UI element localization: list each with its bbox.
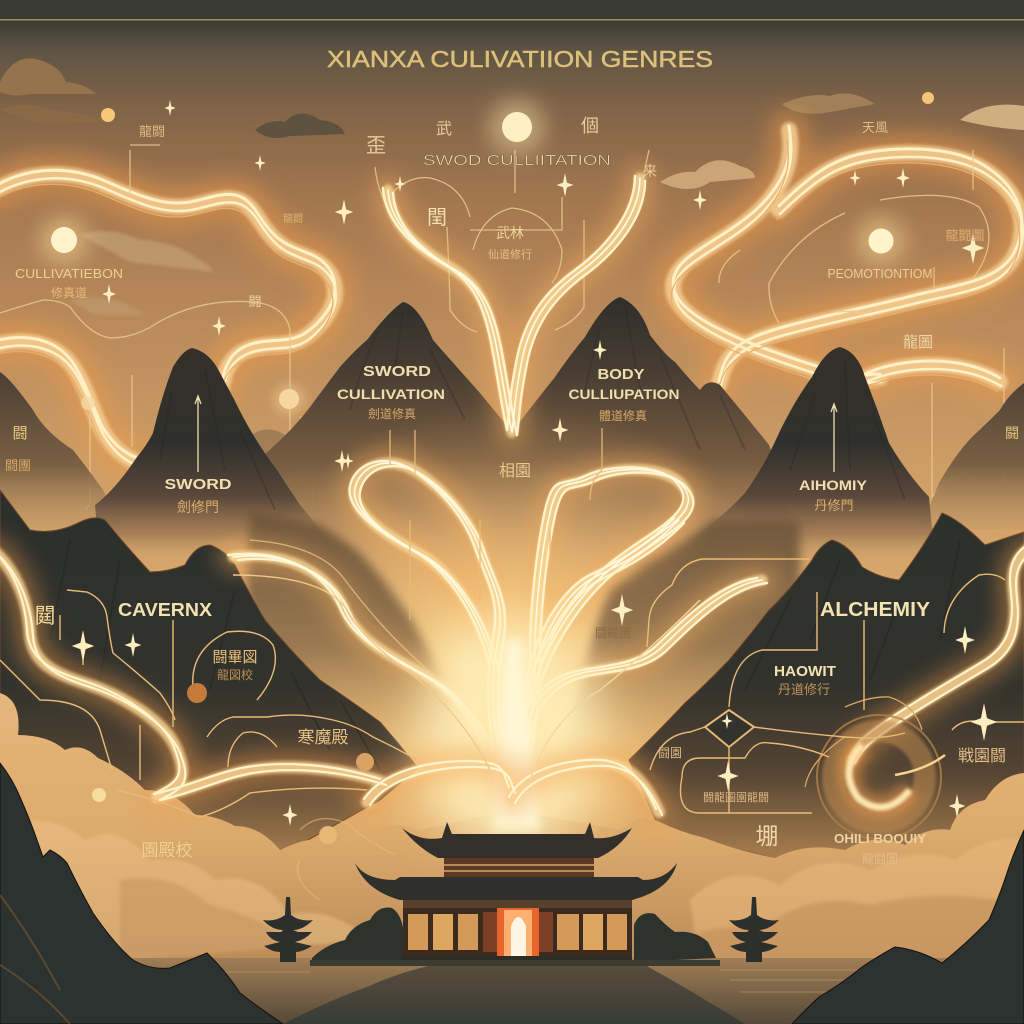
sparkle stars xyxy=(72,100,997,826)
label: promotion right: PEOMOTIONTIOM xyxy=(828,266,932,281)
left mid mountain xyxy=(95,348,345,560)
water in the foreground xyxy=(0,958,1024,1024)
label: lower right: OHILI BOOUIY xyxy=(834,831,926,846)
label: cultivation left: 闘 xyxy=(248,294,262,309)
diamond node xyxy=(705,710,754,747)
label: small script center: 闘園 xyxy=(658,746,682,760)
temple xyxy=(310,822,720,966)
label: cultivation left: 龍闘 xyxy=(283,212,303,225)
lower left mountain xyxy=(0,490,418,850)
label: small script center: 園殿校 xyxy=(142,841,192,860)
label: promotion right: 龍圖 xyxy=(903,334,933,351)
lower right mountain xyxy=(629,513,1024,860)
ground path xyxy=(283,965,745,1024)
right trees xyxy=(634,913,716,962)
left small pagoda xyxy=(263,897,313,962)
label: lower right xyxy=(756,747,1006,866)
far background mountains xyxy=(0,372,1024,530)
label: cultivation left: CULLIVATIEBON xyxy=(15,266,123,281)
label: small script center: 相園 xyxy=(499,462,531,480)
label: cavernx: CAVERNX xyxy=(118,600,212,620)
label: sword cultivation top: 個 xyxy=(581,116,599,136)
central spirit light column xyxy=(420,615,600,855)
back ranges flanking the centre xyxy=(240,510,800,780)
label: edge script xyxy=(5,425,1019,473)
label: cultivation left: 龍闘 xyxy=(139,124,165,139)
label: body cultivation mountain: 體道修真 xyxy=(599,408,647,423)
label: cavernx xyxy=(34,600,348,747)
label: sword cultivation top: 来 xyxy=(643,163,657,179)
label: sword cultivation top: SWOD CULLIITATION xyxy=(423,152,611,169)
label: edge script: 闘團 xyxy=(5,458,31,473)
label: body cultivation mountain xyxy=(568,366,680,423)
right mid mountain xyxy=(680,347,935,560)
label: promotion right: 天風 xyxy=(862,120,888,135)
label: body cultivation mountain: BODY xyxy=(598,366,644,383)
label: cultivation left: 修真道 xyxy=(51,285,87,300)
label: sword cultivation top xyxy=(366,116,657,261)
alchemy ring xyxy=(805,697,945,839)
alchemy arrow xyxy=(831,404,837,472)
label: sword cultivation top: 武林 xyxy=(496,225,524,241)
label: alchemy: 丹道修行 xyxy=(778,682,830,697)
label: sword cultivation top: 武 xyxy=(436,120,452,138)
thin connector lines on the sky xyxy=(0,145,1004,510)
label: lower right: 戦園闘 xyxy=(958,747,1006,765)
foreground right mountain xyxy=(792,830,1024,1024)
clouds in the upper sky xyxy=(0,58,1024,315)
lower qi streams xyxy=(0,545,1024,815)
label: edge script: 闘 xyxy=(1005,425,1019,441)
label: lower right: 龍闘圖 xyxy=(862,851,898,866)
label: sword cultivation mountain: 劍道修真 xyxy=(368,406,416,421)
label: sword cultivation mountain: CULLIVATION xyxy=(337,386,445,402)
label: small script center xyxy=(142,462,769,860)
label: sword cultivation mountain xyxy=(337,363,445,421)
label: sword cultivation top: 歪 xyxy=(366,135,386,157)
sword arrow xyxy=(195,396,201,472)
label: cavernx: 闘畢図 xyxy=(212,649,258,666)
top border band xyxy=(0,0,1024,20)
lower cloud sea xyxy=(0,693,1024,965)
label: sword xyxy=(164,476,232,515)
glowing orbs xyxy=(40,92,934,844)
label: alchemy xyxy=(774,599,931,697)
label: promotion right xyxy=(828,120,985,351)
label: body cultivation mountain: CULLIUPATION xyxy=(568,386,680,402)
label: cultivation left xyxy=(15,124,303,309)
label: alchemy mountain: AIHOMIY xyxy=(799,477,868,493)
label: alchemy mountain xyxy=(799,477,868,513)
label: small script center: 闘龍圖 xyxy=(595,625,631,640)
label: alchemy: ALCHEMIY xyxy=(820,599,931,621)
label: promotion right: 龍闘圖 xyxy=(945,228,985,243)
label: sword cultivation mountain: SWORD xyxy=(363,363,431,380)
centre qi glow xyxy=(212,400,812,1000)
upper qi streams behind mountains xyxy=(0,126,1023,472)
label: sword cultivation top: 仙道修行 xyxy=(488,247,532,261)
label: cavernx: 寒魔殿 xyxy=(298,728,348,747)
right small pagoda xyxy=(729,897,779,962)
label: sword cultivation top: 閏 xyxy=(427,207,447,229)
left trees xyxy=(312,908,405,962)
central branching qi tree xyxy=(228,176,767,803)
label: cavernx: 閮 xyxy=(34,605,56,628)
label: lower right: 堋 xyxy=(756,823,778,849)
label: alchemy mountain: 丹修門 xyxy=(814,498,854,513)
thin connector lines on the lower mountains xyxy=(0,428,1024,900)
label: alchemy: HAOWIT xyxy=(774,663,836,680)
central mountains xyxy=(245,297,790,640)
title: XIANXA CULIVATIION GENRES xyxy=(327,46,713,72)
label: sword: SWORD xyxy=(164,476,232,493)
label: edge script: 闘 xyxy=(12,425,28,442)
label: sword: 劍修門 xyxy=(177,499,219,515)
foreground left mountain xyxy=(0,763,283,1024)
label: cavernx: 龍図校 xyxy=(217,667,253,682)
label: small script center: 闘龍圖園龍闘 xyxy=(703,790,769,804)
